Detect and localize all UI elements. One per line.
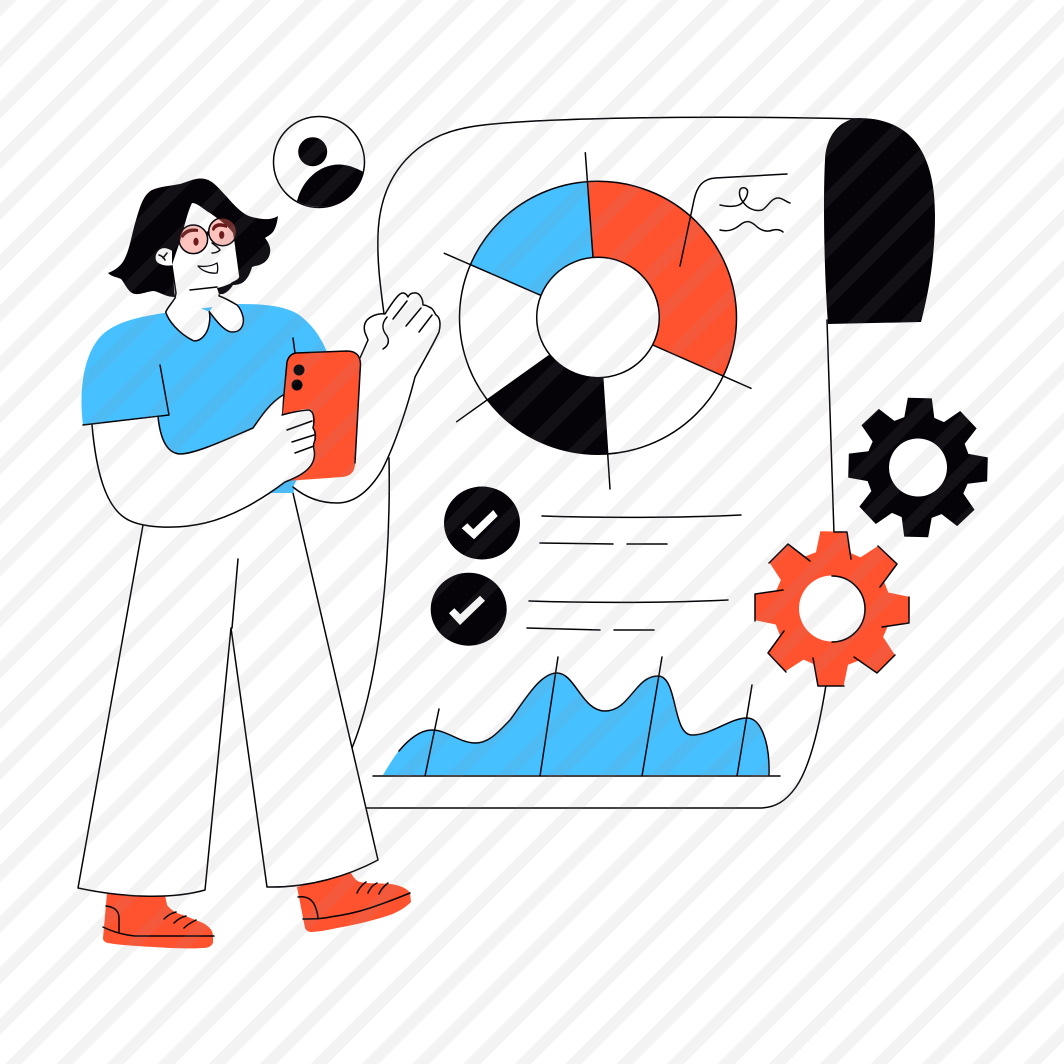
- left arm with hand on phone: [92, 395, 315, 527]
- right shoe: [297, 871, 411, 932]
- ear: [155, 247, 172, 266]
- area chart: [373, 657, 780, 776]
- icon: check badge: [444, 486, 520, 560]
- icon: black gear: [847, 396, 989, 539]
- donut radial lines: [444, 153, 751, 489]
- icon: red gear: [754, 530, 910, 687]
- icon: check badge: [431, 573, 507, 646]
- segment: red: [588, 182, 736, 376]
- donut outlines: [460, 181, 736, 454]
- left shoe: [103, 893, 214, 948]
- blue t-shirt: [81, 304, 330, 493]
- trousers: [78, 493, 378, 896]
- checklist item 1: [444, 486, 741, 560]
- person: [78, 179, 440, 948]
- mouth: [198, 263, 218, 273]
- face outline: [172, 248, 240, 311]
- nose: [212, 243, 220, 253]
- right arm with raised hand: [293, 293, 440, 503]
- donut chart: [444, 152, 752, 490]
- segment: black: [488, 356, 607, 454]
- eyebrows and eyes: [181, 223, 227, 246]
- neck and face: [172, 203, 240, 311]
- checklist item 2: [431, 573, 728, 646]
- hair: [108, 179, 278, 297]
- red phone: [282, 351, 360, 481]
- shirt collar: [166, 296, 243, 341]
- glasses: [173, 218, 237, 254]
- callout with signature: [680, 174, 790, 266]
- panel: paper document: [352, 117, 935, 808]
- icon: profile badge: [274, 116, 364, 208]
- segment: blue: [472, 182, 592, 294]
- black paper curl: [824, 118, 935, 324]
